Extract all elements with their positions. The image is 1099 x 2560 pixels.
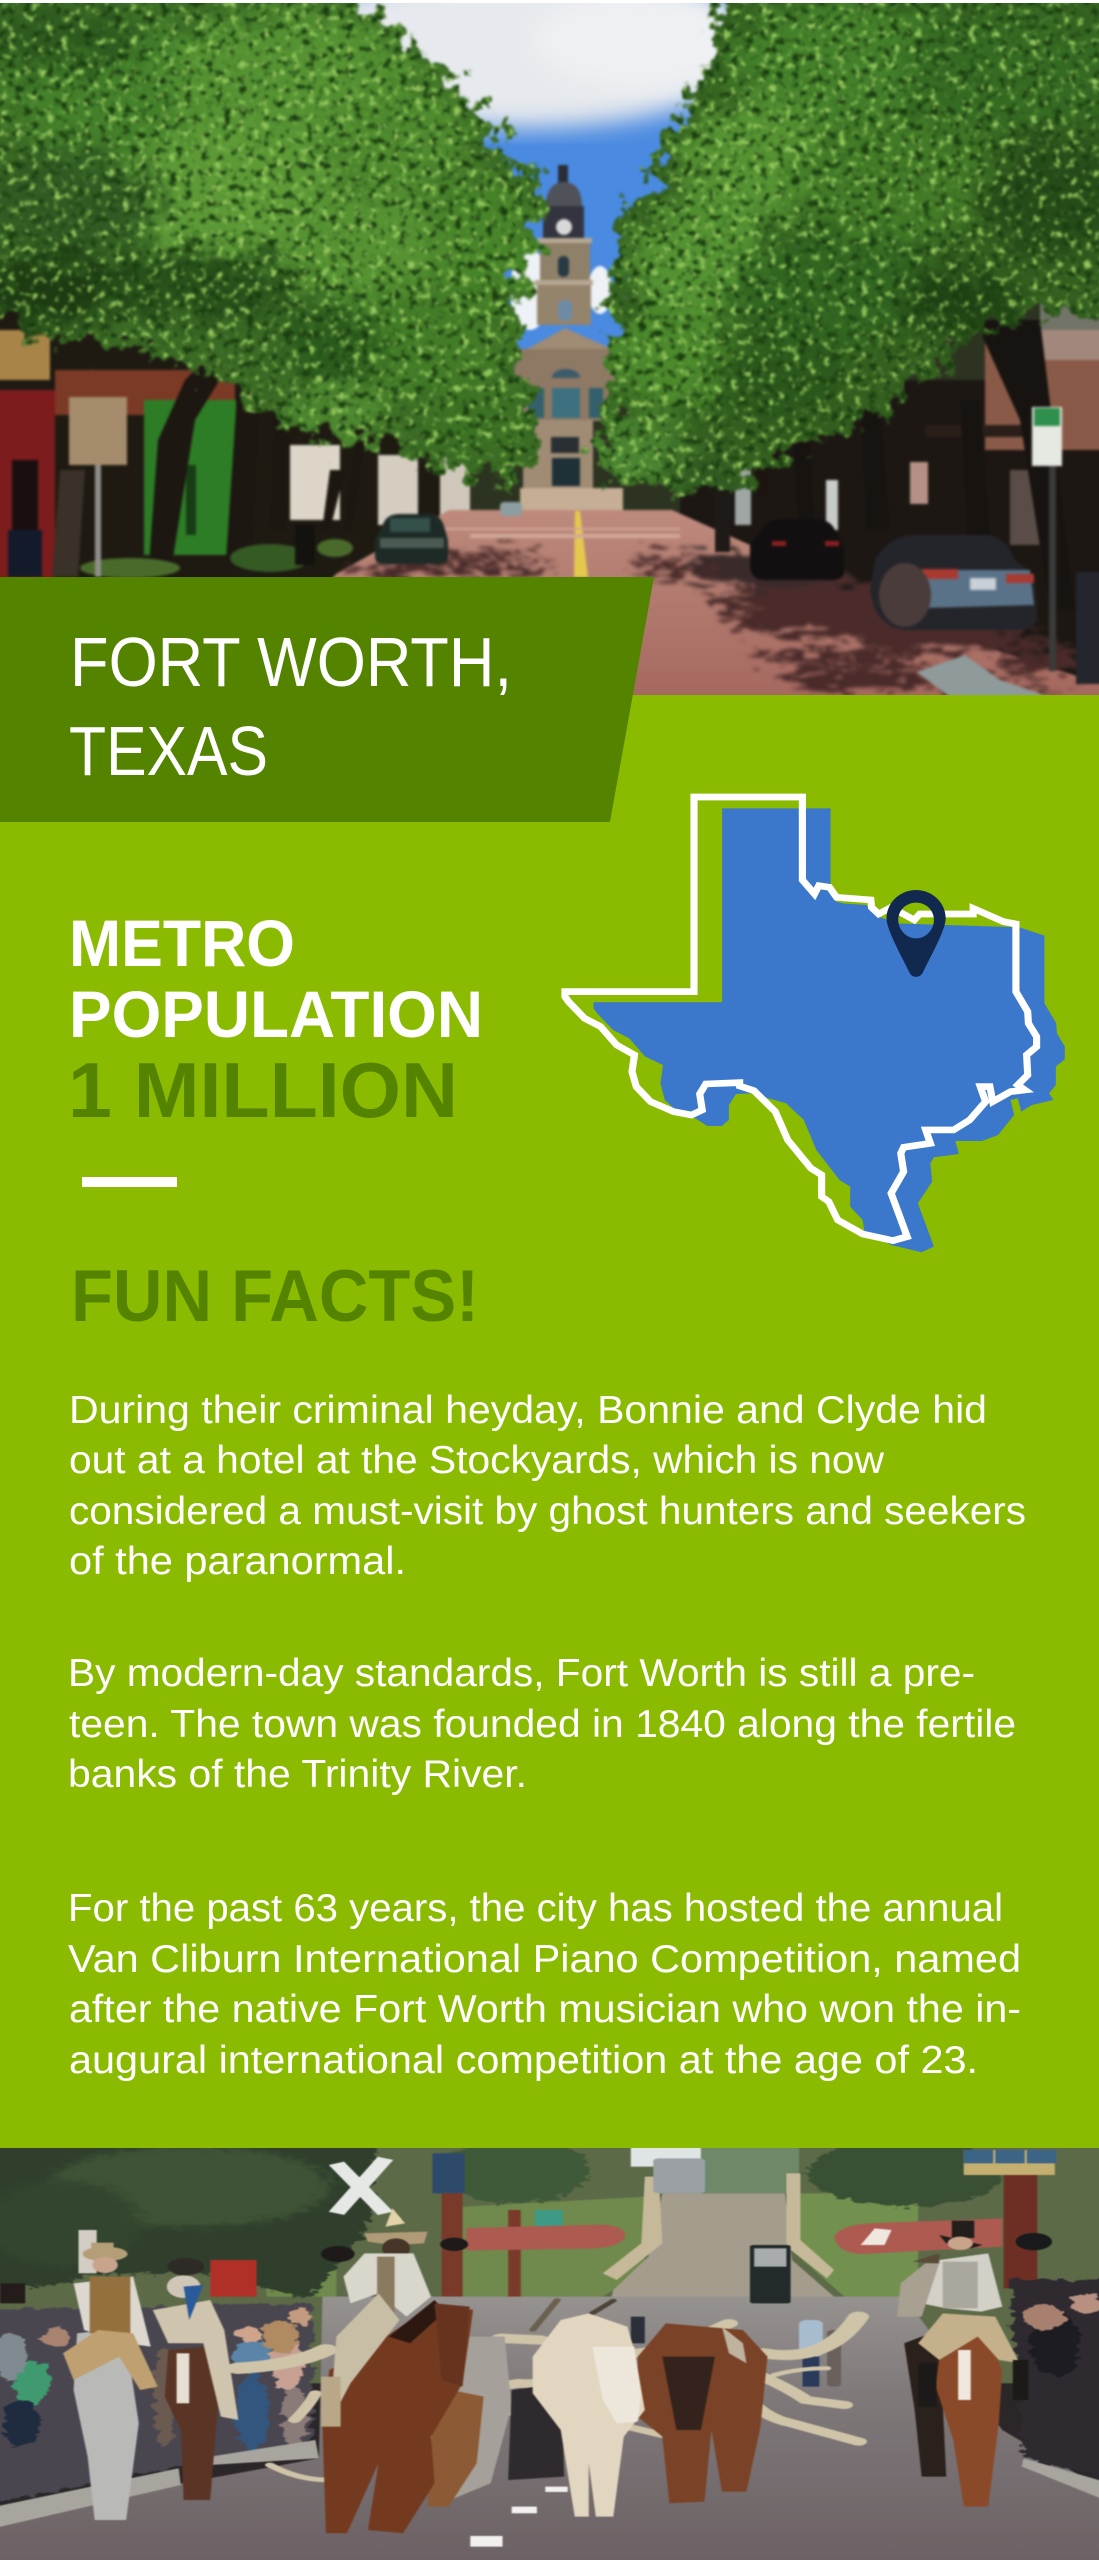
- photo base: [0, 2382, 1099, 2506]
- left street sign: [69, 397, 127, 577]
- fun facts heading: FUN FACTS!: [71, 1256, 479, 1337]
- grassy slopes: [266, 2193, 918, 2300]
- population value: 1 MILLION: [68, 1046, 458, 1134]
- longhorn horns: [238, 2300, 859, 2480]
- cattle behind: [428, 2337, 564, 2507]
- fact 1: considered a must-visit by ghost hunters and seekers: [69, 1490, 1026, 1533]
- fact 3: For the past 63 years, the city has hosted the annual: [68, 1887, 1003, 1930]
- right buildings: [680, 300, 1099, 700]
- stone stairway: [603, 2173, 834, 2303]
- location pin: [887, 890, 946, 977]
- road lane dashes: [470, 2487, 568, 2547]
- right curb: [1022, 2458, 1099, 2507]
- background: trees and sky: [0, 2137, 1099, 2383]
- brown longhorn: [638, 2323, 767, 2503]
- left curb: [0, 2440, 319, 2532]
- metro population label: POPULATION: [69, 977, 483, 1051]
- parked car: silver: [870, 535, 1037, 630]
- left tree canopy: [0, 0, 545, 480]
- left shrubs and bin: [8, 525, 353, 578]
- right tree canopy: [590, 0, 1099, 495]
- hero photo: Tarrant County Courthouse street: [0, 0, 1099, 720]
- left tree trunks: [51, 368, 342, 577]
- white longhorn: [533, 2313, 645, 2517]
- banners, posts and signs: [0, 2150, 1056, 2307]
- brown horse and rider: [153, 2258, 238, 2500]
- right street sign: [1032, 407, 1062, 671]
- small distant car: [500, 502, 522, 516]
- parked car: green: [375, 514, 448, 564]
- title banner: [0, 577, 654, 822]
- bottom photo: Stockyards longhorn cattle drive: [0, 2130, 1099, 2560]
- main green panel: [0, 695, 1099, 2148]
- road: [331, 508, 1099, 695]
- trash bin: [1076, 572, 1099, 684]
- left crowd: [0, 2303, 313, 2507]
- fact 2: By modern-day standards, Fort Worth is still a pre-: [68, 1652, 975, 1695]
- divider bar: [82, 1177, 177, 1187]
- title text: FORT WORTH,: [70, 623, 512, 701]
- street and brick roadway: [0, 2297, 1099, 2560]
- central horse and sombrero rider: [321, 2208, 473, 2533]
- fact 3: [68, 1887, 1021, 2082]
- Texas map: [565, 797, 1065, 1252]
- right tree trunks: [962, 319, 1052, 547]
- parked car: black: [750, 519, 844, 580]
- white horse and rider: [63, 2243, 158, 2520]
- photo base: [468, 290, 1099, 515]
- title text: TEXAS: [69, 712, 268, 790]
- road patch: [917, 655, 1050, 697]
- fact 1: of the paranormal.: [69, 1540, 406, 1583]
- utility cart: [750, 2245, 791, 2303]
- yellow centre line: [574, 511, 588, 577]
- fact 3: Van Cliburn International Piano Competition, named: [68, 1938, 1021, 1981]
- white SUV at stairway top: [653, 2158, 705, 2193]
- road crosswalk bands: [440, 528, 680, 538]
- fact 2: [68, 1652, 1016, 1796]
- sky with clouds: [355, 3, 730, 351]
- distant pedestrians: [631, 2317, 841, 2387]
- fact 1: [69, 1389, 1026, 1583]
- title text: [69, 623, 512, 790]
- white state outline: [565, 797, 1037, 1241]
- left buildings: [0, 310, 472, 577]
- blue state shape: [593, 808, 1065, 1252]
- metro population label: [69, 906, 483, 1051]
- fact 2: banks of the Trinity River.: [68, 1753, 527, 1796]
- right horses and riders: [897, 2221, 1028, 2507]
- railroad crossing sign: [336, 2158, 385, 2213]
- courthouse tower and building: [501, 165, 623, 511]
- metro population label: METRO: [69, 906, 295, 980]
- fact 1: During their criminal heyday, Bonnie and Clyde hid: [69, 1389, 987, 1432]
- fact 1: out at a hotel at the Stockyards, which is now: [69, 1439, 885, 1482]
- fact 3: after the native Fort Worth musician who won the in-: [69, 1988, 1021, 2031]
- right crowd and fence: [1009, 2280, 1099, 2487]
- courthouse-side traffic signal: [715, 490, 730, 552]
- tree foliage: [0, 2137, 1002, 2300]
- fact 2: teen. The town was founded in 1840 along the fertile: [69, 1703, 1016, 1746]
- road shadows: [340, 551, 1099, 696]
- fact 3: augural international competition at the age of 23.: [69, 2039, 978, 2082]
